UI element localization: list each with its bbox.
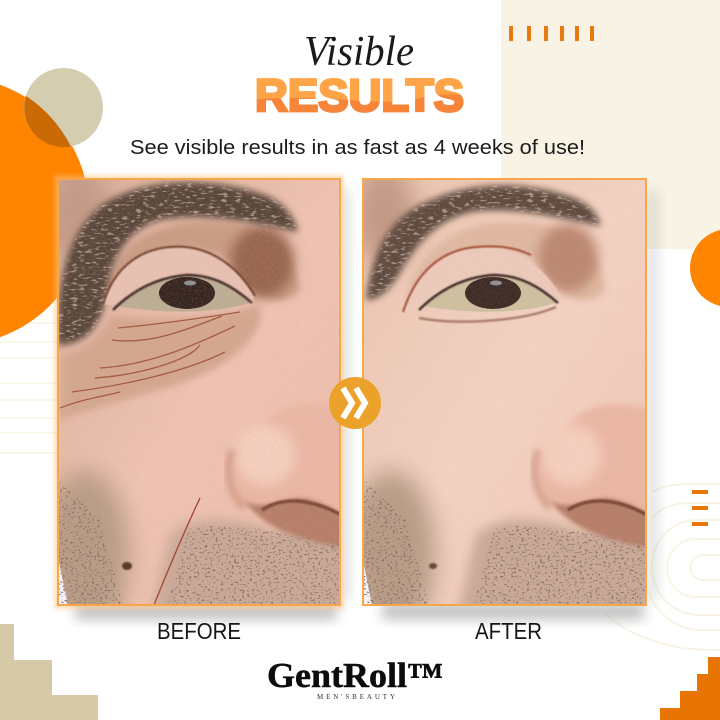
large orange circle xyxy=(0,77,89,345)
eyebrow xyxy=(366,186,601,300)
eye socket shadow xyxy=(230,226,294,298)
right orange circle xyxy=(690,229,720,307)
eye xyxy=(424,275,556,312)
arrow badge xyxy=(329,377,381,429)
mole xyxy=(122,562,132,570)
left horizontal stripes xyxy=(0,323,58,453)
bottom left corner background xyxy=(59,562,68,604)
bottom left corner background xyxy=(364,566,372,604)
skin pores xyxy=(363,179,646,605)
stubble xyxy=(58,480,345,610)
subtitle: See visible results in as fast as 4 weeks of use! xyxy=(130,137,585,159)
title line: Visible: Visible xyxy=(304,29,414,75)
upper eyelid xyxy=(103,247,255,305)
lower lid xyxy=(419,307,556,322)
under eye wrinkles xyxy=(60,305,261,420)
brow hair highlights xyxy=(366,186,601,300)
eye socket shadow xyxy=(538,224,598,292)
orange dashes right xyxy=(692,490,708,526)
tan circle xyxy=(24,68,103,147)
label: before: BEFORE xyxy=(157,618,241,644)
orange tick marks xyxy=(509,26,594,41)
logo tagline: MEN'SBEAUTY xyxy=(317,693,395,701)
label: after: AFTER xyxy=(475,618,542,644)
circle overlap xyxy=(24,96,71,147)
stairs bottom right xyxy=(660,657,720,720)
title xyxy=(255,29,464,121)
skin base xyxy=(59,180,339,604)
brow hair highlights xyxy=(58,182,298,345)
logo wordmark: GentRoll™ xyxy=(267,656,443,695)
cream block top right xyxy=(501,0,720,249)
upper eyelid xyxy=(410,248,560,300)
eye xyxy=(118,275,250,312)
brow bone shading xyxy=(100,222,300,300)
brow bone shading xyxy=(406,222,606,300)
nasolabial line xyxy=(154,498,200,605)
stubble xyxy=(364,480,651,610)
skin pores xyxy=(58,179,340,605)
panel: before photo xyxy=(52,172,346,612)
logo xyxy=(267,656,443,701)
panel shadows xyxy=(75,190,659,620)
title line: RESULTS: RESULTS xyxy=(255,70,464,121)
stairs bottom left xyxy=(0,624,98,720)
eyebrow xyxy=(58,182,298,345)
concentric racetrack lines xyxy=(604,484,720,650)
skin base xyxy=(360,170,650,615)
mole xyxy=(429,563,437,569)
panel: after photo xyxy=(362,178,647,606)
